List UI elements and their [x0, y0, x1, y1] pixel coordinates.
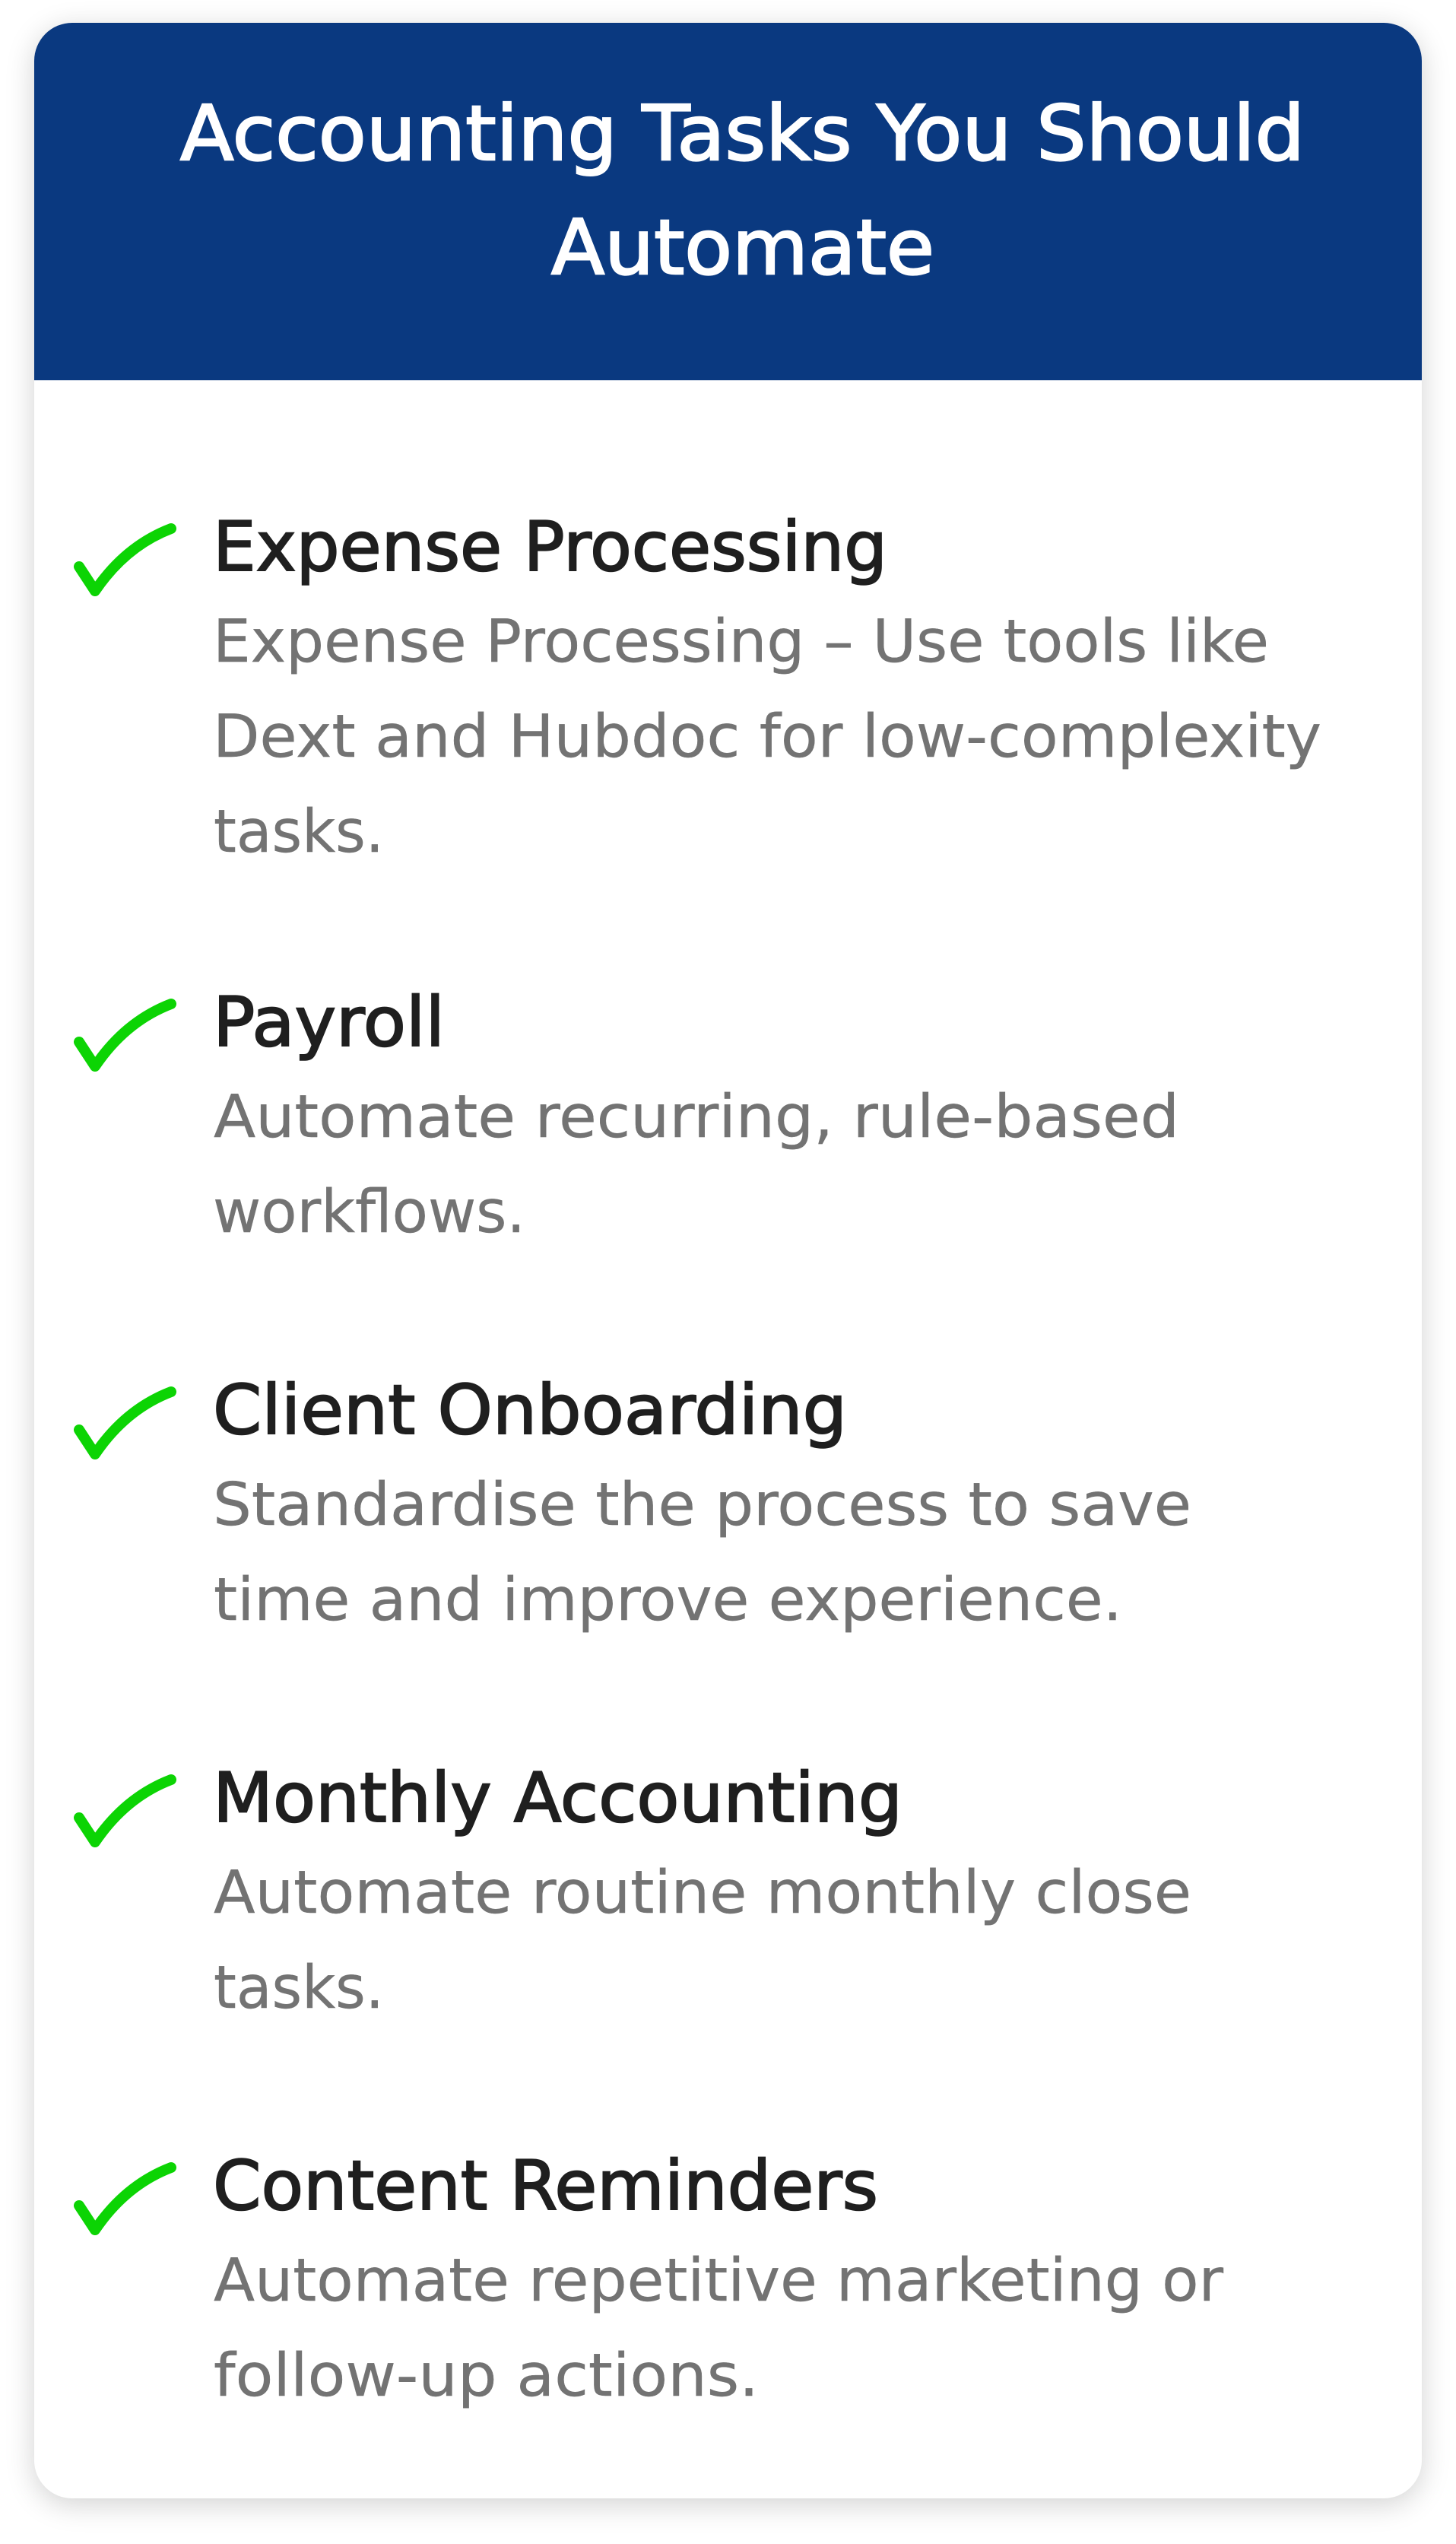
- text: Client Onboarding description: Standardise the process to save: [213, 1471, 1191, 1539]
- text: Expense Processing description: [213, 608, 1321, 866]
- heading: Expense Processing: Expense Processing: [213, 507, 887, 587]
- item: Content Reminders: [79, 2146, 1224, 2410]
- text: Content Reminders description: follow-up actions.: [214, 2342, 759, 2410]
- text: Payroll description: workflows.: [213, 1178, 525, 1247]
- heading: Client Onboarding: Client Onboarding: [213, 1370, 847, 1450]
- heading: Payroll: Payroll: [213, 983, 445, 1062]
- text: Payroll description: [213, 1083, 1179, 1247]
- text: Client Onboarding description: [213, 1471, 1191, 1634]
- item: Payroll: [79, 983, 1179, 1247]
- text: Content Reminders description: Automate repetitive marketing or: [214, 2247, 1224, 2315]
- text: Payroll description: Automate recurring, rule-based: [214, 1083, 1179, 1151]
- icon: green check: [79, 1004, 171, 1066]
- icon: green check: [79, 1392, 171, 1454]
- heading: Monthly Accounting: Monthly Accounting: [213, 1758, 902, 1838]
- icon: green check: [79, 1780, 171, 1842]
- icon: green check: [79, 529, 171, 591]
- title: [180, 89, 1305, 292]
- item: Client Onboarding: [79, 1370, 1191, 1634]
- text: Content Reminders description: [214, 2247, 1224, 2410]
- text: Expense Processing description: Expense Processing – Use tools like: [213, 608, 1269, 676]
- title: Automate: [551, 203, 934, 292]
- text: Monthly Accounting description: Automate routine monthly close: [214, 1859, 1191, 1927]
- heading: Content Reminders: Content Reminders: [213, 2146, 878, 2226]
- title: Accounting Tasks You Should: [180, 89, 1305, 178]
- text: Monthly Accounting description: tasks.: [214, 1954, 384, 2022]
- text: Client Onboarding description: time and improve experience.: [214, 1566, 1122, 1634]
- item: Expense Processing: [79, 507, 1321, 866]
- header banner: [34, 23, 1422, 380]
- item: Monthly Accounting: [79, 1758, 1191, 2022]
- text: Expense Processing description: Dext and Hubdoc for low-complexity: [213, 703, 1321, 771]
- text: Expense Processing description: tasks.: [214, 798, 384, 866]
- icon: green check: [79, 2168, 171, 2230]
- text: Monthly Accounting description: [214, 1859, 1191, 2022]
